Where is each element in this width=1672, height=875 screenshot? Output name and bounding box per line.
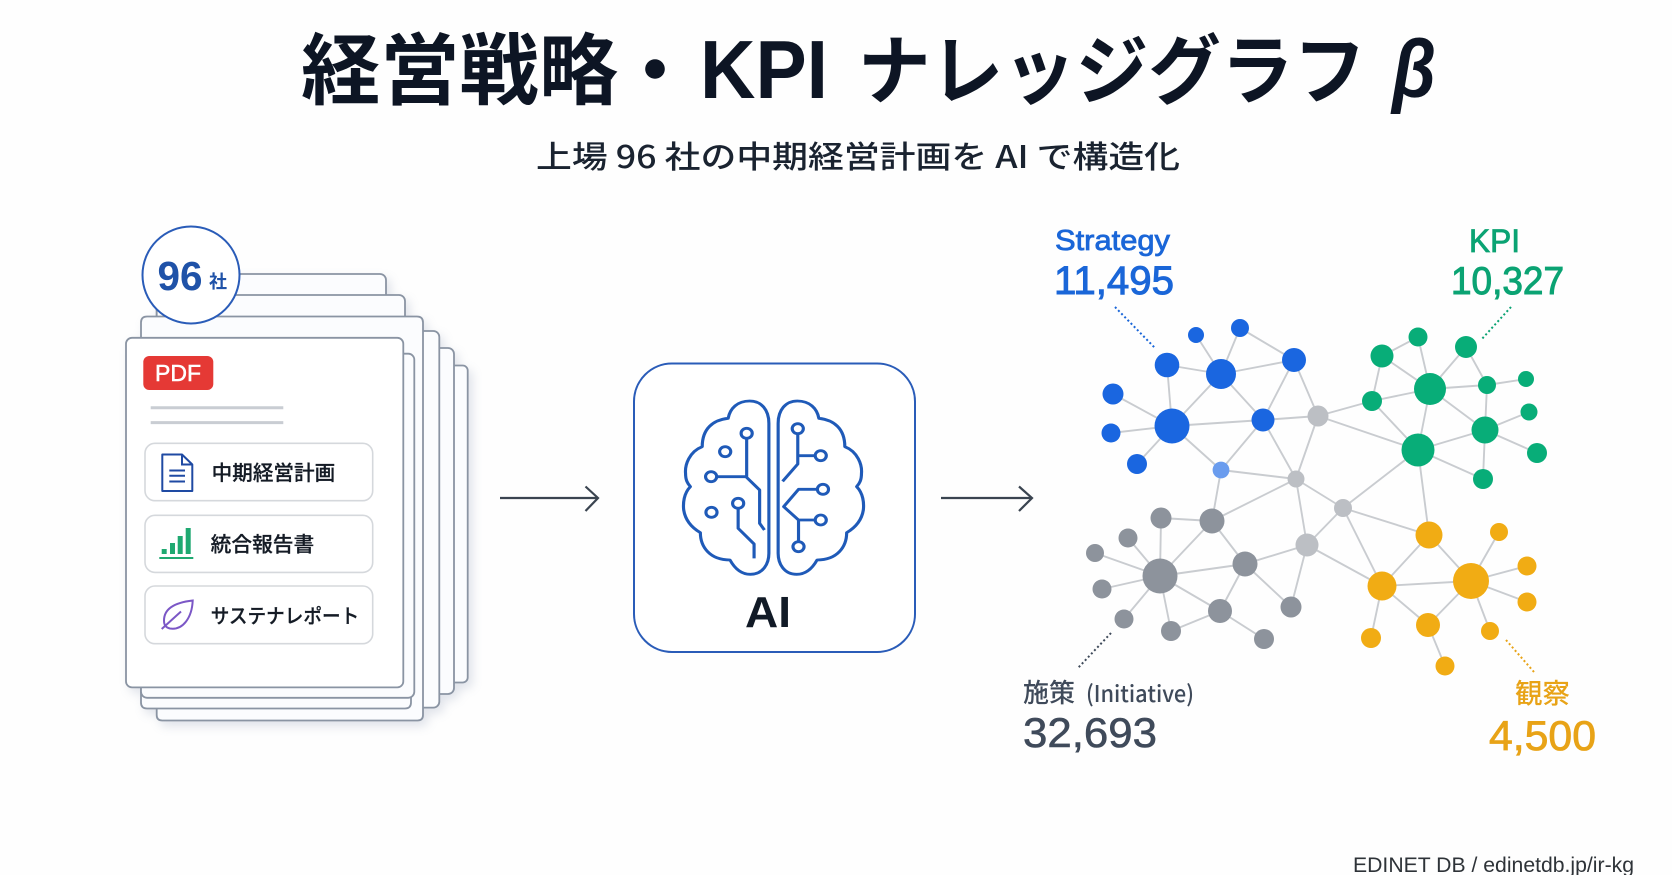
cluster: strategy nodes	[1102, 319, 1306, 478]
title	[301, 9, 1436, 121]
row: mid-term plan: 中期経営計画	[212, 456, 335, 486]
cluster: observation nodes	[1361, 522, 1536, 676]
row: integrated report	[145, 515, 373, 572]
subtitle: 上場 96 社の中期経営計画を AI で構造化	[536, 132, 1180, 177]
graph edges	[1095, 328, 1537, 666]
icon: leaf	[162, 600, 193, 629]
AI label: AI	[745, 588, 791, 637]
callout: Observation: 4,500	[1489, 712, 1596, 759]
icon: brain circuit	[683, 401, 864, 574]
callout: Initiative: 施策	[1023, 673, 1075, 710]
placeholder text lines	[151, 408, 283, 423]
badge: 96 companies: 96	[158, 253, 202, 299]
stacked sheets	[126, 274, 468, 720]
badge: 96 companies	[142, 226, 240, 324]
badge: 96 companies: 社	[209, 268, 227, 294]
row: sustainability report: サステナレポート	[211, 600, 359, 629]
row: mid-term plan	[145, 443, 373, 501]
cluster: initiative nodes	[1086, 508, 1302, 649]
callout: Observation: 観察	[1515, 671, 1570, 711]
icon: document	[162, 454, 192, 491]
callout: KPI: 10,327	[1451, 260, 1564, 303]
title: 経営戦略	[301, 9, 618, 121]
cluster: KPI nodes	[1362, 328, 1547, 489]
callout: Strategy: 11,495	[1054, 259, 1174, 303]
cluster: connector nodes	[1288, 406, 1352, 556]
arrow: documents to AI	[500, 486, 598, 511]
callout: KPI: KPI	[1469, 223, 1520, 259]
callout: Strategy: Strategy	[1055, 225, 1171, 257]
panel: AI box	[634, 364, 915, 652]
row: sustainability report	[145, 586, 373, 644]
title: KPI	[700, 23, 828, 116]
chart: knowledge graph	[1086, 319, 1547, 676]
row: integrated report: 統合報告書	[211, 528, 314, 558]
icon: bar chart	[159, 528, 193, 559]
callout: Initiative: (Initiative)	[1086, 675, 1194, 709]
PDF badge: PDF	[155, 360, 201, 386]
callout: Initiative: 32,693	[1023, 709, 1157, 756]
panel: document stack	[126, 226, 468, 720]
callout: Initiative	[1023, 633, 1194, 756]
title: β	[1390, 24, 1436, 115]
PDF badge	[143, 356, 213, 390]
callout: Strategy	[1054, 225, 1174, 348]
callout: Observation	[1489, 640, 1596, 759]
title: ナレッジグラフ	[858, 10, 1366, 120]
arrow: AI to graph	[941, 486, 1032, 511]
callout: KPI	[1451, 223, 1564, 340]
